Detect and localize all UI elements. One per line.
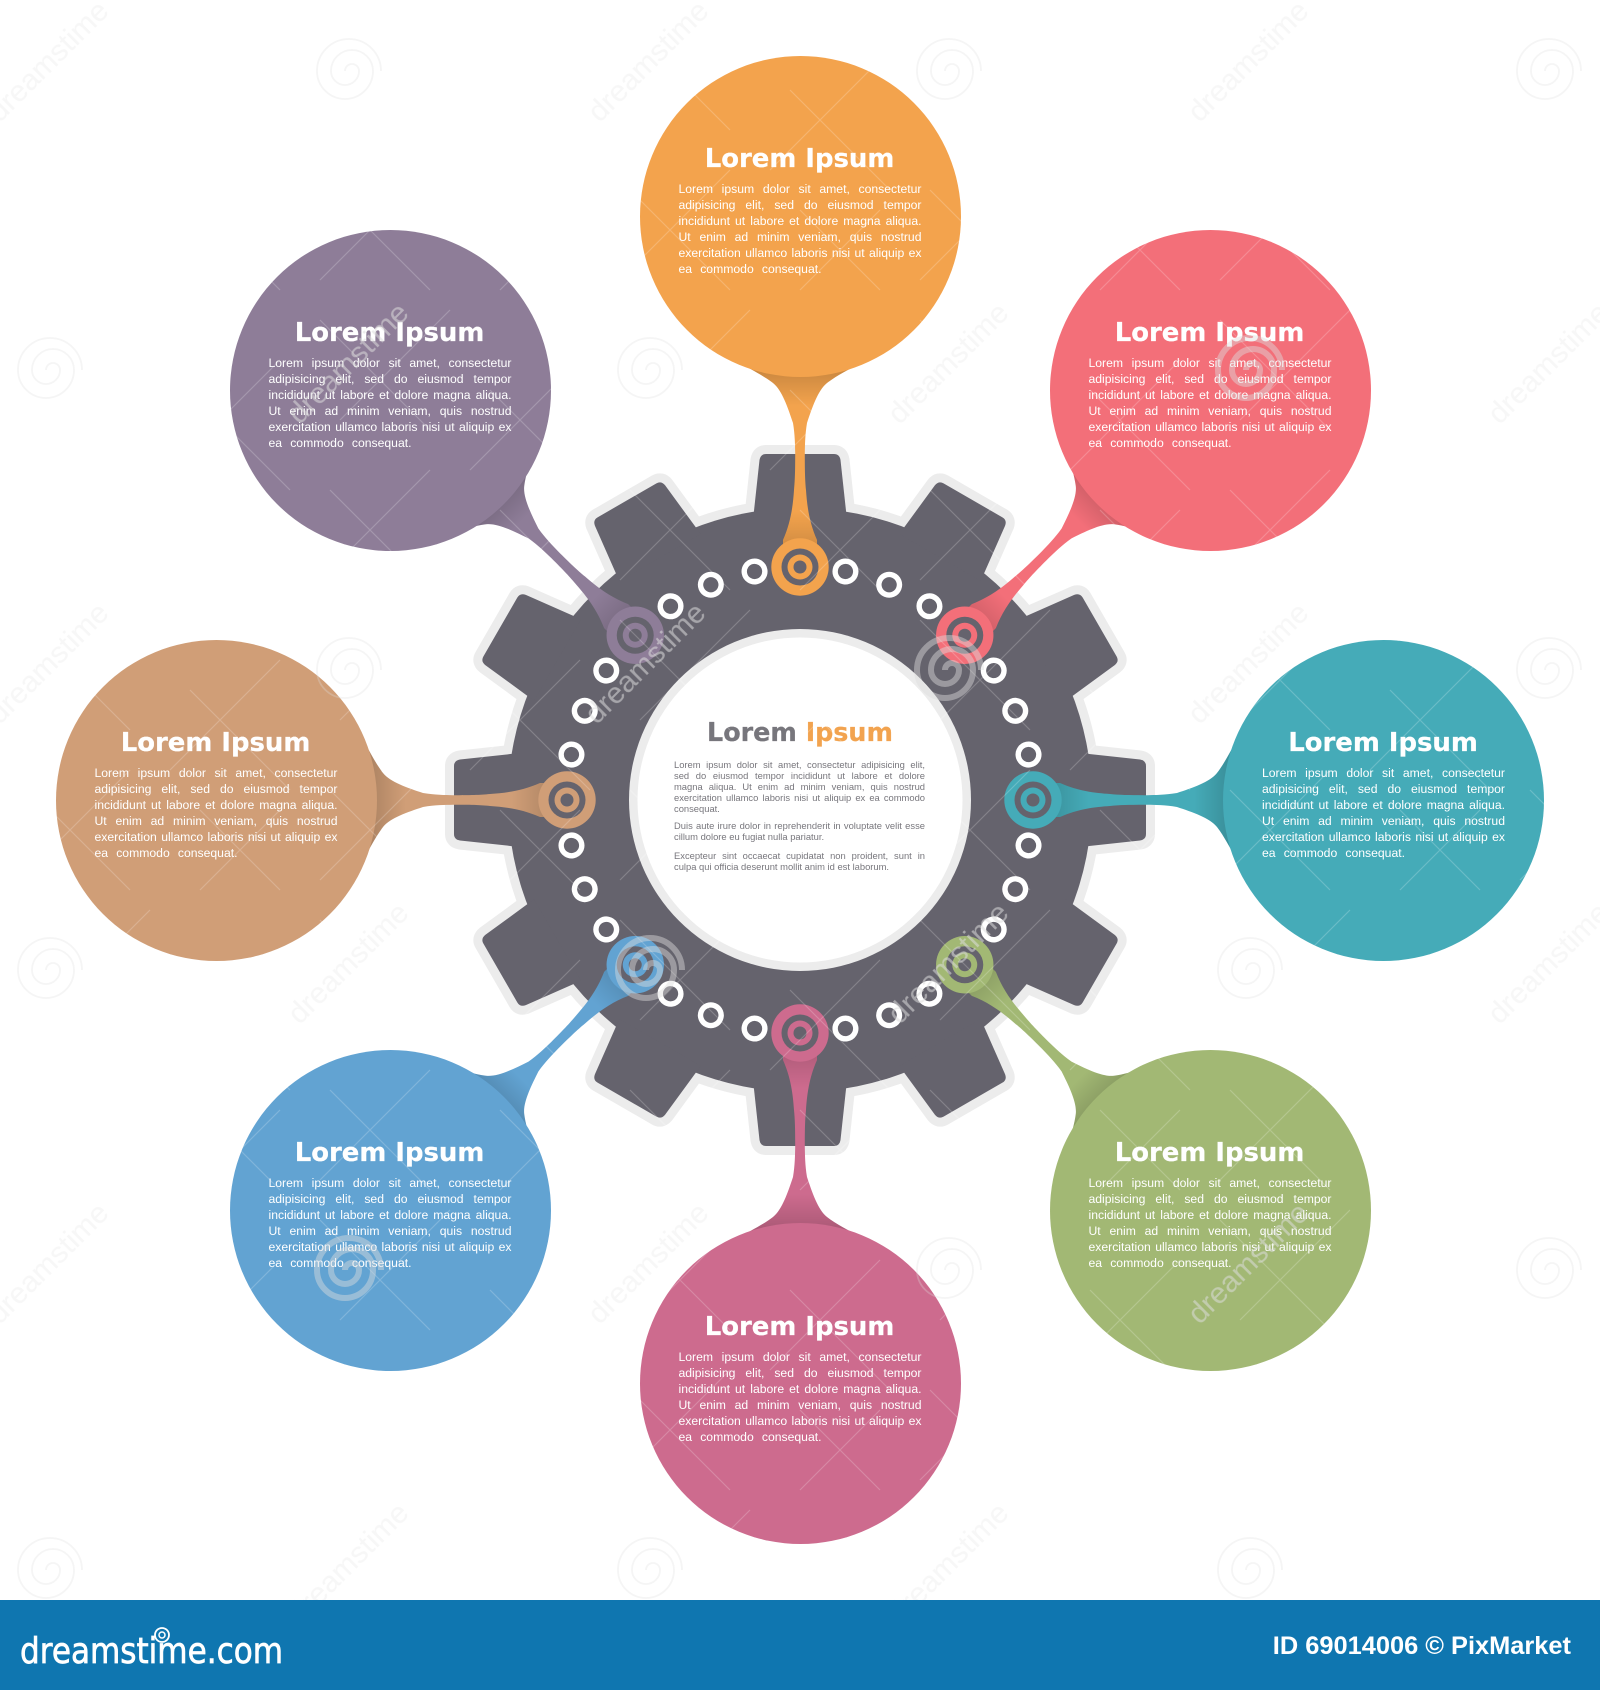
body text	[1262, 766, 1505, 860]
body text: Lorem ipsum dolor sit amet, consectetur	[678, 182, 922, 196]
body text: exercitation ullamco laboris nisi ut aliquip ex	[678, 246, 922, 260]
centre paragraph 2: Duis aute irure dolor in reprehenderit in voluptate velit esse	[674, 820, 925, 831]
centre paragraph 1: sed do eiusmod tempor incididunt ut labore et dolore	[674, 770, 925, 781]
body text: adipisicing elit, sed do eiusmod tempor	[268, 1192, 512, 1206]
body text: ea commodo consequat.	[1088, 1256, 1232, 1270]
watermark: faint dreamstime text: dreamstime	[881, 296, 1015, 430]
body text: adipisicing elit, sed do eiusmod tempor	[1088, 1192, 1332, 1206]
panel: orange bubble	[640, 56, 960, 376]
body text: Lorem ipsum dolor sit amet, consectetur	[268, 1176, 512, 1190]
heading: Lorem Ipsum	[121, 728, 310, 758]
connector: coral	[901, 446, 1154, 699]
body text: adipisicing elit, sed do eiusmod tempor	[678, 198, 922, 212]
body text: incididunt ut labore et dolore magna aliqua.	[268, 388, 512, 402]
body text: ea commodo consequat.	[1262, 846, 1405, 860]
body text: exercitation ullamco laboris nisi ut aliquip ex	[94, 830, 338, 844]
centre paragraph 2: cillum dolore eu fugiat nulla pariatur.	[674, 831, 824, 842]
body text	[1088, 356, 1332, 450]
centre paragraph 1: consequat.	[674, 803, 720, 814]
body text: exercitation ullamco laboris nisi ut aliquip ex	[268, 1240, 512, 1254]
body text: exercitation ullamco laboris nisi ut aliquip ex	[678, 1414, 922, 1428]
connector: pink	[738, 1004, 862, 1238]
body text: ea commodo consequat.	[268, 1256, 412, 1270]
body text: Lorem ipsum dolor sit amet, consectetur	[94, 766, 338, 780]
body text: adipisicing elit, sed do eiusmod tempor	[94, 782, 338, 796]
body text: ea commodo consequat.	[268, 436, 412, 450]
body text: Ut enim ad minim veniam, quis nostrud	[268, 1224, 512, 1238]
panel: coral bubble	[1050, 230, 1370, 550]
panel: brown bubble	[56, 640, 376, 960]
heading: Lorem Ipsum	[295, 1138, 484, 1168]
body text: exercitation ullamco laboris nisi ut aliquip ex	[268, 420, 512, 434]
body text: Ut enim ad minim veniam, quis nostrud	[678, 230, 922, 244]
centre paragraph 3: Excepteur sint occaecat cupidatat non proident, sunt in	[674, 850, 925, 860]
heading: Lorem Ipsum	[1288, 728, 1478, 758]
body text: Ut enim ad minim veniam, quis nostrud	[94, 814, 338, 828]
panel: teal bubble	[1223, 640, 1544, 960]
watermark: strong spirals	[317, 338, 1282, 1298]
watermark: faint dreamstime text: dreamstime	[281, 1496, 415, 1630]
centre paragraph 1: Lorem ipsum dolor sit amet, consectetur adipisicing elit,	[674, 759, 925, 770]
footer image id: ID 69014006 © PixMarket	[1273, 1632, 1572, 1660]
body text	[678, 1350, 922, 1444]
body text: Lorem ipsum dolor sit amet, consectetur	[678, 1350, 922, 1364]
panel: blue bubble	[230, 1050, 550, 1370]
body text: Lorem ipsum dolor sit amet, consectetur	[1262, 766, 1505, 780]
body text: incididunt ut labore et dolore magna aliqua.	[678, 1382, 922, 1396]
body text: Lorem ipsum dolor sit amet, consectetur	[268, 356, 512, 370]
body text	[268, 356, 512, 450]
body text: Ut enim ad minim veniam, quis nostrud	[1088, 404, 1332, 418]
body text	[94, 766, 338, 860]
body text: Ut enim ad minim veniam, quis nostrud	[1262, 814, 1505, 828]
centre text block	[674, 717, 925, 872]
panel: pink bubble	[640, 1223, 960, 1544]
body text: incididunt ut labore et dolore magna aliqua.	[678, 214, 922, 228]
body text: incididunt ut labore et dolore magna aliqua.	[268, 1208, 512, 1222]
body text	[1088, 1176, 1332, 1270]
body text: adipisicing elit, sed do eiusmod tempor	[1262, 782, 1505, 796]
centre paragraph 3	[674, 850, 925, 872]
gear with halo and centre hole	[454, 454, 1146, 1146]
heading: Lorem Ipsum	[705, 144, 894, 174]
watermark: faint dreamstime text: dreamstime	[881, 1496, 1015, 1630]
body text: Ut enim ad minim veniam, quis nostrud	[678, 1398, 922, 1412]
centre paragraph 3: culpa qui officia deserunt mollit anim id est laborum.	[674, 860, 889, 872]
heading: Lorem Ipsum	[1115, 1138, 1304, 1168]
watermark: faint dreamstime text: dreamstime	[1181, 596, 1315, 730]
watermark: faint dreamstime text: dreamstime	[281, 896, 415, 1030]
footer logo: dreamstime.com	[20, 1631, 283, 1672]
body text: exercitation ullamco laboris nisi ut aliquip ex	[1262, 830, 1505, 844]
body text: adipisicing elit, sed do eiusmod tempor	[678, 1366, 922, 1380]
connector: teal	[1004, 738, 1238, 862]
body text: adipisicing elit, sed do eiusmod tempor	[1088, 372, 1332, 386]
body text: adipisicing elit, sed do eiusmod tempor	[268, 372, 512, 386]
connector: green	[901, 901, 1154, 1154]
centre paragraph 1: magna aliqua. Ut enim ad minim veniam, quis nostrud	[674, 781, 925, 792]
connector: orange	[738, 362, 862, 596]
body text: incididunt ut labore et dolore magna aliqua.	[1262, 798, 1505, 812]
watermark: strong dreamstime text: dreamstime	[281, 296, 415, 430]
body text	[268, 1176, 512, 1270]
connector: blue	[446, 901, 699, 1154]
footer bar	[0, 1600, 1600, 1690]
connector: purple	[446, 446, 699, 699]
body text: ea commodo consequat.	[94, 846, 238, 860]
small white rings around the gear	[559, 559, 1041, 1041]
body text: Lorem ipsum dolor sit amet, consectetur	[1088, 1176, 1332, 1190]
body text: Lorem ipsum dolor sit amet, consectetur	[1088, 356, 1332, 370]
watermark: strong dreamstime text: dreamstime	[881, 896, 1015, 1030]
heading: Lorem Ipsum	[1115, 318, 1304, 348]
centre paragraph 1	[674, 759, 925, 814]
body text: incididunt ut labore et dolore magna aliqua.	[1088, 1208, 1332, 1222]
body text: exercitation ullamco laboris nisi ut aliquip ex	[1088, 1240, 1332, 1254]
centre heading: Lorem Ipsum	[707, 717, 893, 747]
centre paragraph 2	[674, 820, 925, 842]
watermark: strong dreamstime text	[281, 296, 1315, 1330]
watermark: faint dreamstime text: dreamstime	[581, 1196, 715, 1330]
body text: ea commodo consequat.	[1088, 436, 1232, 450]
body text: exercitation ullamco laboris nisi ut aliquip ex	[1088, 420, 1332, 434]
body text: incididunt ut labore et dolore magna aliqua.	[94, 798, 338, 812]
panel: purple bubble	[230, 230, 550, 550]
body text: ea commodo consequat.	[678, 1430, 822, 1444]
body text	[678, 182, 922, 276]
heading: Lorem Ipsum	[295, 318, 484, 348]
body text: incididunt ut labore et dolore magna aliqua.	[1088, 388, 1332, 402]
panel: green bubble	[1050, 1050, 1370, 1370]
body text: ea commodo consequat.	[678, 262, 822, 276]
connector: brown	[362, 738, 596, 862]
centre paragraph 1: exercitation ullamco laboris nisi ut aliquip ex ea commodo	[674, 792, 925, 803]
watermark: strong dreamstime text: dreamstime	[578, 596, 712, 730]
body text: Ut enim ad minim veniam, quis nostrud	[1088, 1224, 1332, 1238]
watermark: strong dreamstime text: dreamstime	[1181, 1196, 1315, 1330]
body text: Ut enim ad minim veniam, quis nostrud	[268, 404, 512, 418]
heading: Lorem Ipsum	[705, 1312, 894, 1342]
